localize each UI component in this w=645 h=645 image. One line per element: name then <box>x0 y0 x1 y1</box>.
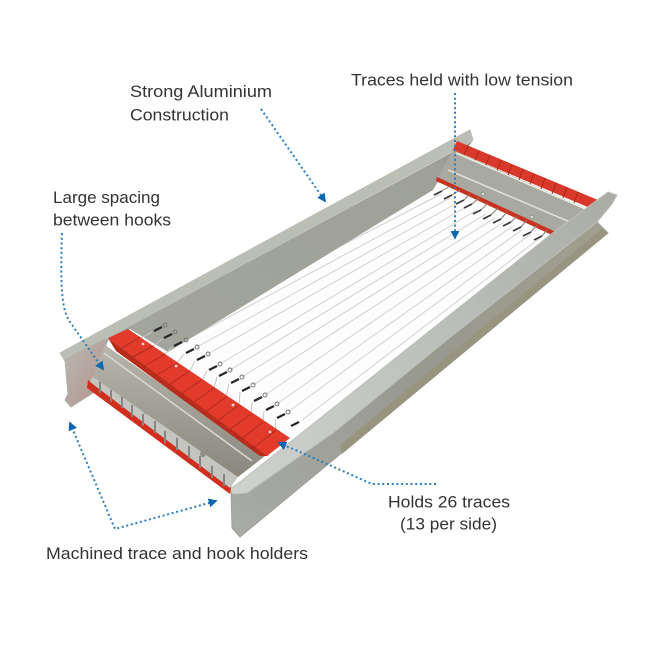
label: strong aluminium construction: Strong Aluminium <box>130 83 272 101</box>
near rail top flange <box>230 192 617 494</box>
far rail top flange <box>60 130 473 361</box>
far end second rail line <box>448 170 570 222</box>
far swivels <box>434 191 542 240</box>
arrow: large spacing between hooks <box>61 233 103 369</box>
label: holds 26 traces <box>388 494 510 534</box>
far red strip <box>436 177 556 236</box>
near rail outer wall <box>231 222 608 537</box>
label: strong aluminium construction: Construction <box>130 106 229 124</box>
block pins <box>142 343 271 433</box>
arrow: traces held with low tension <box>454 93 456 238</box>
label: large spacing between hooks <box>53 189 171 230</box>
label: large spacing between hooks: Large spacing <box>53 189 160 207</box>
label: holds 26 traces: Holds 26 traces <box>388 494 510 512</box>
red holder blocks <box>108 329 290 456</box>
floor <box>168 190 556 438</box>
left end plate <box>65 339 105 407</box>
arrow: strong aluminium construction <box>261 109 325 201</box>
block separators <box>119 337 276 449</box>
red block front face <box>108 338 268 456</box>
near rail <box>230 192 617 537</box>
label: machined trace and hook holders: Machined trace and hook holders <box>46 545 308 563</box>
lower red strip <box>87 380 232 494</box>
far end plates <box>437 150 590 235</box>
hooks <box>100 381 224 486</box>
hook plate <box>90 376 240 488</box>
tray floor and wires <box>165 190 556 438</box>
far end rail line <box>456 153 588 210</box>
far rail inner wall <box>65 141 473 361</box>
near swivel rings <box>163 323 290 414</box>
label: holds 26 traces: (13 per side) <box>400 516 497 534</box>
label: traces held with low tension: Traces held with low tension <box>351 72 573 90</box>
hook plate rivets <box>110 386 206 457</box>
tray: aluminium frame <box>60 130 598 407</box>
far swivel leaders <box>442 186 547 236</box>
far end rivets <box>481 192 534 219</box>
near end: trace and hook holders <box>87 329 290 494</box>
steel bar highlight <box>104 353 252 461</box>
steel bar <box>93 345 265 477</box>
label: large spacing between hooks: between hooks <box>53 212 171 230</box>
near swivel leaders <box>141 332 276 430</box>
swivels <box>141 186 547 430</box>
arrow: machined trace and hook holders <box>70 423 216 529</box>
arrow: holds 26 traces <box>279 443 436 484</box>
near swivel bodies <box>154 327 299 426</box>
far block separators <box>464 146 578 203</box>
trace wires <box>165 190 540 420</box>
near rail lower tan strip <box>340 229 608 454</box>
label: strong aluminium construction <box>130 83 272 124</box>
far red blocks <box>453 141 598 208</box>
